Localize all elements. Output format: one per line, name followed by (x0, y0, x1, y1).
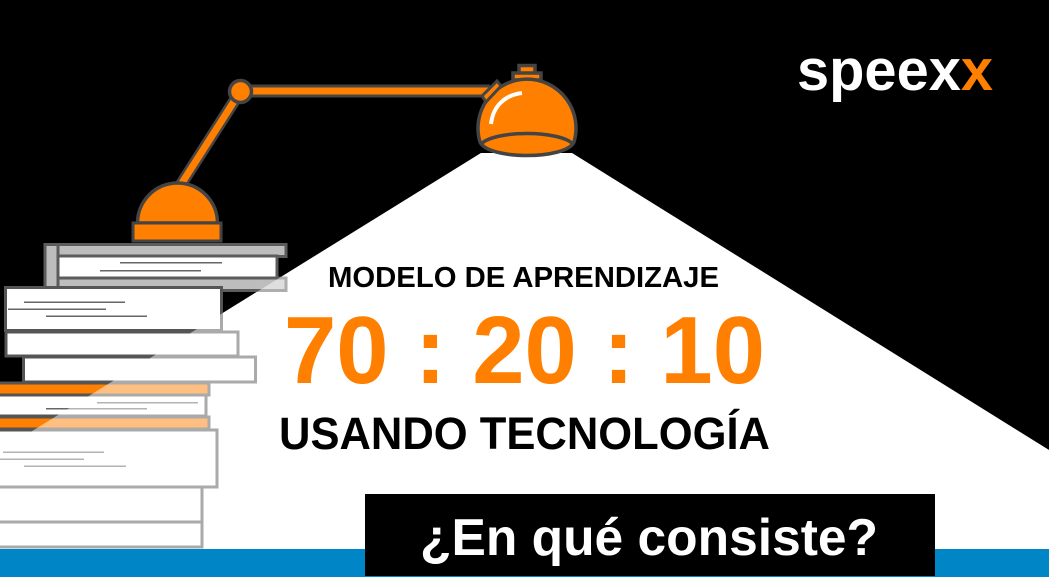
heading: modelo de aprendizaje: MODELO DE APRENDIZAJE (328, 262, 719, 294)
speexx logo: speexx (797, 38, 993, 103)
heading: 70:20:10: 70 : 20 : 10 (284, 297, 765, 404)
light cone (0, 153, 1049, 577)
lamp highlight (491, 93, 522, 124)
book 2 (6, 288, 222, 330)
lamp arm upper (240, 84, 490, 98)
lamp head cap (519, 66, 535, 74)
lamp head dome (478, 79, 576, 156)
lamp base dome (138, 183, 218, 223)
lamp head collar (482, 81, 501, 102)
book 1 grey (45, 244, 286, 290)
lamp base band (133, 223, 221, 241)
book 6 (0, 430, 217, 487)
desk lamp (133, 66, 576, 241)
lamp head rim (481, 134, 573, 144)
book 3 (6, 332, 238, 356)
button: en que consiste: ¿En qué consiste? (420, 509, 878, 567)
book 4 (24, 357, 256, 382)
button: en que consiste (365, 494, 935, 576)
heading: usando tecnologia: USANDO TECNOLOGÍA (279, 408, 770, 459)
stack of books (0, 244, 286, 547)
lamp joint (230, 80, 252, 102)
lamp arm lower (180, 92, 240, 186)
blue footer band (0, 549, 1049, 577)
light overlay on books (0, 153, 1049, 549)
orange book upper (0, 383, 209, 429)
book 7 (0, 487, 202, 547)
